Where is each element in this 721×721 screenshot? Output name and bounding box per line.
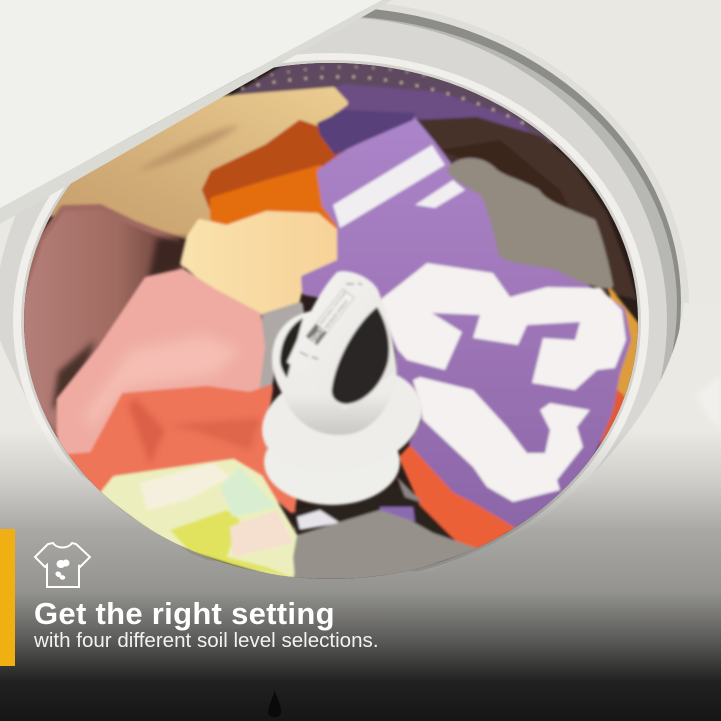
tub rim inner band <box>0 17 667 623</box>
rose garment <box>20 207 182 440</box>
mustard garment <box>608 285 640 400</box>
coral folds <box>128 400 164 461</box>
subheading: with four different soil level selections. <box>34 629 379 652</box>
tub rim right side <box>350 4 689 382</box>
handle top mark <box>346 283 362 285</box>
handle label <box>306 288 355 345</box>
agitator neck <box>272 300 397 435</box>
drum holes <box>227 77 533 128</box>
washer front deck <box>0 303 721 721</box>
jersey stripes <box>333 145 445 228</box>
yellow accent bar <box>0 529 15 666</box>
dark gap by pink garment <box>148 238 190 280</box>
tan shadow fold <box>143 124 238 170</box>
handle <box>287 271 397 410</box>
bright orange garment <box>213 168 345 232</box>
dark drop mark <box>268 690 281 718</box>
bottom dark gradient <box>0 430 721 721</box>
tub interior and clothes <box>24 63 638 579</box>
coral garment <box>69 388 294 510</box>
pink garment <box>60 272 262 470</box>
pastel peach patch <box>230 510 293 557</box>
gray knit garment <box>450 161 610 285</box>
handle label: SQUEEZE HANDLE <box>323 299 349 330</box>
gray patch <box>260 305 305 392</box>
gray fabric under agitator <box>397 477 423 503</box>
lower disc <box>264 419 400 505</box>
purple jersey <box>304 120 628 527</box>
red edge on right <box>598 388 625 448</box>
control bump at right edge <box>695 375 721 428</box>
red-orange garment <box>398 444 516 550</box>
handle label: REMOVABLE SOFTENER <box>319 289 348 326</box>
white fabric bit <box>297 510 340 530</box>
handle bottom mark <box>300 352 318 359</box>
tan garment <box>40 90 345 238</box>
dark gap under agitator <box>293 484 456 542</box>
upper disc <box>252 352 432 488</box>
pastel yellow patch <box>170 510 295 578</box>
dark fold in rose garment <box>52 340 95 410</box>
brown garment <box>417 117 637 300</box>
jersey white lower numeral <box>413 377 590 502</box>
pale yellow garment <box>184 214 345 312</box>
pink highlight <box>87 336 234 423</box>
pastel pale patch <box>140 463 230 510</box>
handle dark scoop <box>332 307 389 404</box>
heading: Get the right setting <box>34 596 335 631</box>
drum wall <box>232 63 556 146</box>
pastel garment <box>103 462 295 578</box>
gray sock <box>293 510 482 580</box>
handle label: 2in1 <box>308 325 326 344</box>
jersey white upper numeral <box>380 263 626 390</box>
icon: stained t-shirt <box>34 542 91 588</box>
purple fabric bit <box>380 507 415 522</box>
pastel mint patch <box>220 467 277 517</box>
rear dark opening <box>280 318 303 378</box>
washer lid <box>0 0 392 224</box>
dark orange garment <box>205 123 342 210</box>
agitator <box>252 271 432 505</box>
dark purple fold <box>317 110 415 155</box>
